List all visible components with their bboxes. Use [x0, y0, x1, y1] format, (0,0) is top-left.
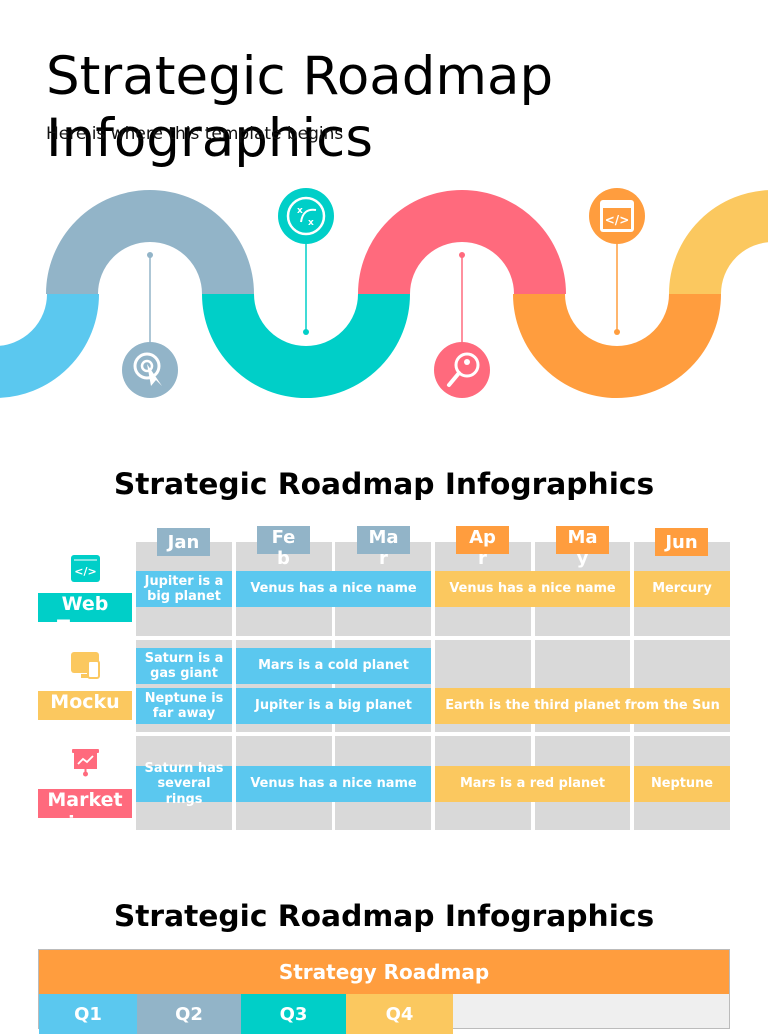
icon: code window: [589, 188, 645, 335]
icon: target cursor: [122, 252, 178, 398]
gantt table: Mars is a cold planet: [258, 658, 409, 673]
gantt table: Jun: [665, 532, 698, 553]
quarters: Q4: [386, 1004, 413, 1025]
gantt table: [38, 526, 730, 830]
icon: code window: </>: [605, 213, 629, 227]
gantt table: gas giant: [150, 666, 218, 681]
label: marketing: Market: [47, 789, 123, 811]
icon: search user: [434, 252, 490, 398]
gantt table: far away: [153, 706, 215, 721]
quarters: Q1: [74, 1004, 102, 1025]
title: Infographics: [46, 108, 373, 169]
gantt table: rings: [166, 792, 202, 807]
gantt table: Venus has a nice name: [449, 581, 616, 596]
quarters: [39, 994, 453, 1034]
icon: devices: [71, 652, 100, 679]
bars: Jupiter is a: [145, 574, 223, 588]
gantt table: Neptune is: [145, 690, 223, 706]
subtitle: Here is where this template begins: [46, 124, 343, 144]
icon: web: </>: [74, 565, 97, 578]
gantt table: Ma: [368, 527, 399, 548]
month tabs: Jan: [168, 532, 199, 553]
icon: presentation: [72, 749, 99, 776]
icon: strategy: x: [308, 218, 314, 228]
icon: strategy: [278, 188, 334, 335]
gantt table: Mars is a red planet: [460, 776, 605, 791]
table header: Strategy Roadmap: [279, 960, 489, 984]
gantt table: Fe: [272, 527, 295, 548]
gantt table: y: [577, 548, 588, 569]
icon: web: [71, 555, 100, 582]
label: marketing: [38, 789, 132, 818]
gantt table: Saturn has: [145, 761, 223, 776]
gantt table: b: [277, 548, 290, 569]
quarters: Q3: [280, 1004, 307, 1025]
table header: [39, 950, 729, 994]
gantt table: Venus has a nice name: [250, 776, 417, 791]
icon: strategy: x: [297, 206, 303, 216]
quarters: Q2: [175, 1004, 203, 1025]
gantt table: Earth is the third planet from the Sun: [445, 698, 720, 713]
label: mockup: [38, 691, 132, 720]
heading 2: Strategic Roadmap Infographics: [114, 467, 654, 502]
gantt table: r: [478, 548, 487, 569]
gantt table: Mercury: [652, 581, 712, 596]
gantt table: Ap: [469, 527, 496, 548]
gantt table: Ma: [567, 527, 598, 548]
bars: big planet: [147, 589, 221, 604]
gantt table: Saturn is a: [145, 650, 223, 666]
gantt table: Jupiter is a big planet: [255, 698, 412, 713]
heading 3: Strategic Roadmap Infographics: [114, 899, 654, 934]
gantt table: several: [157, 776, 211, 791]
wave timeline: [0, 188, 768, 398]
title: Strategic Roadmap: [46, 46, 553, 107]
label: web team: Web: [62, 593, 108, 615]
label: mockup: Mocku: [50, 691, 120, 713]
title: [46, 46, 553, 169]
gantt table: r: [379, 548, 388, 569]
strategy roadmap table: [38, 949, 730, 1029]
gantt table: Venus has a nice name: [250, 581, 417, 596]
label: web team: [38, 593, 132, 622]
month tabs: [157, 528, 210, 556]
bars: [136, 571, 232, 607]
gantt table: Neptune: [651, 776, 713, 791]
